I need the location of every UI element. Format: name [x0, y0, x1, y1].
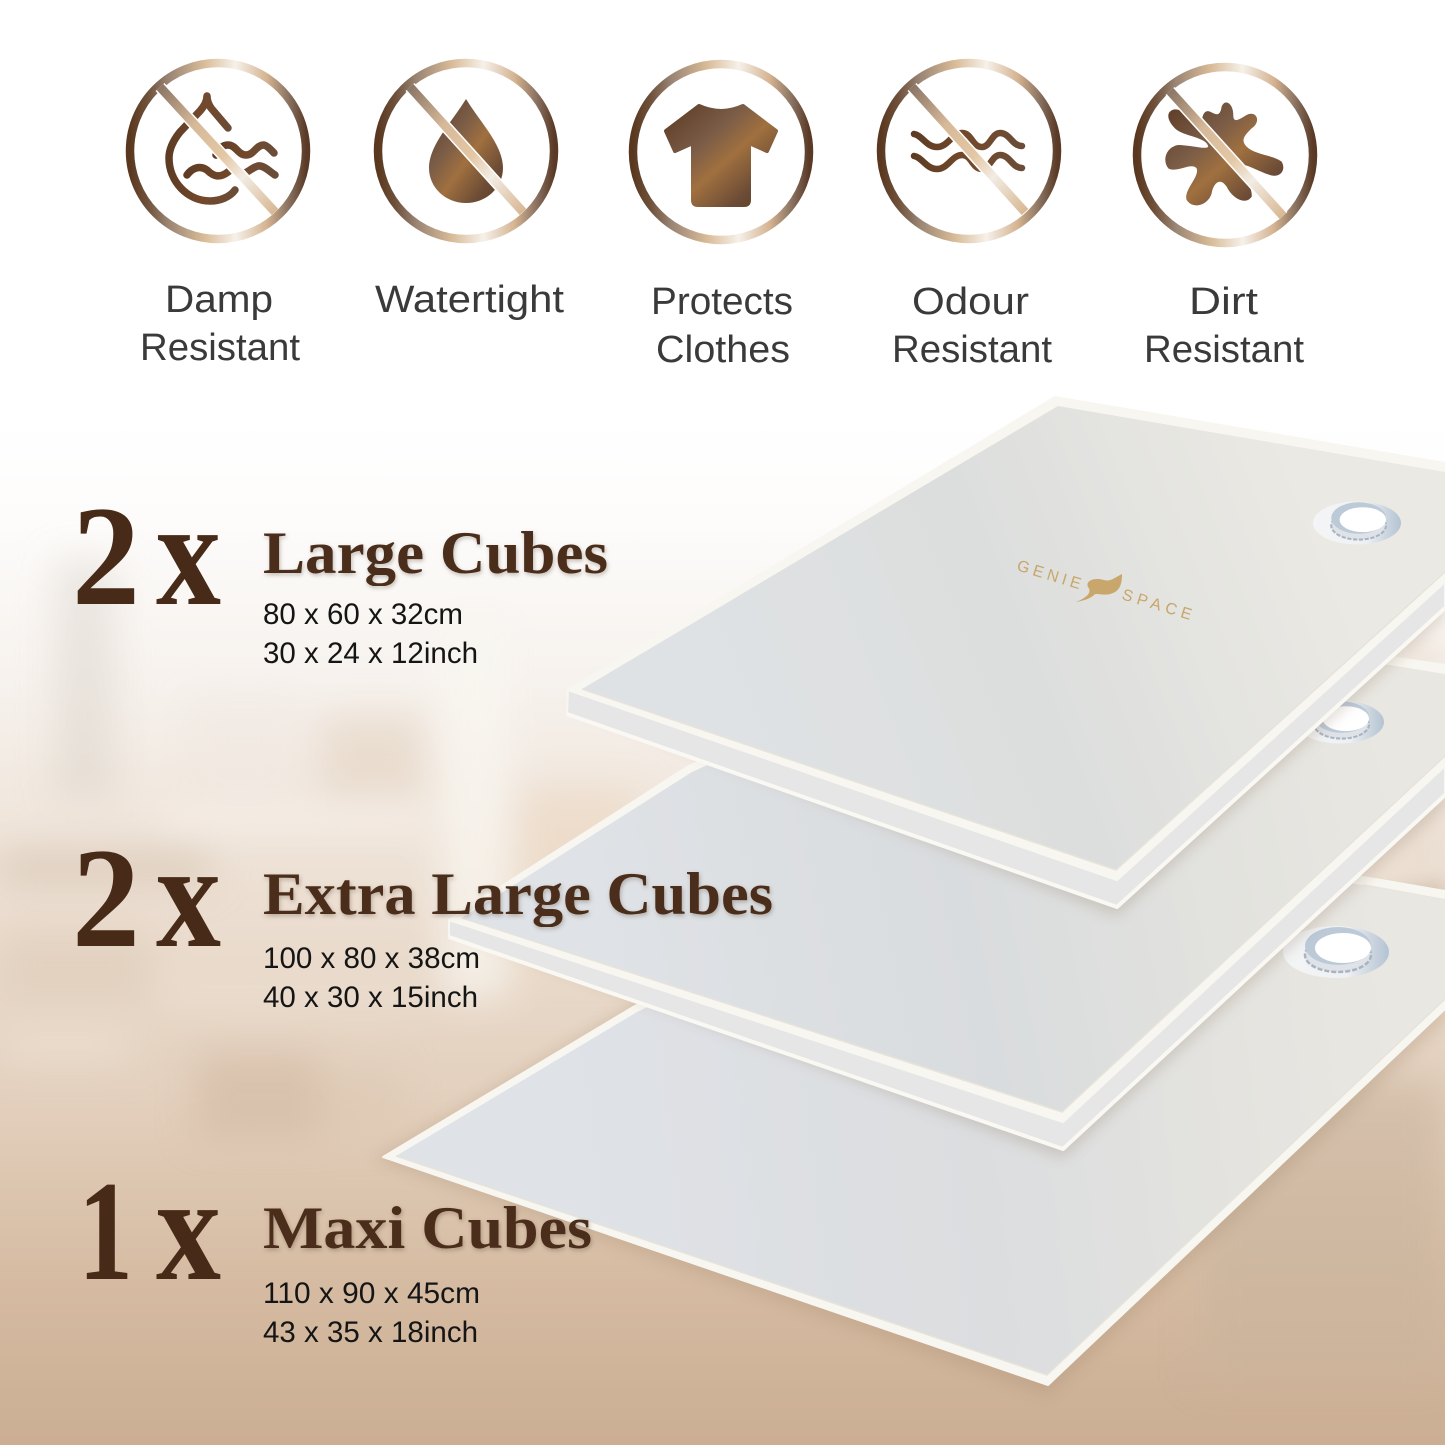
label: odour resistant: Odour: [912, 281, 1029, 323]
valve: extra large cube: [1296, 700, 1384, 744]
row: large cubes: [72, 471, 608, 670]
label: protects clothes: Protects: [651, 281, 793, 323]
quantity 1x: 1: [78, 1152, 133, 1310]
label: damp resistant: Damp: [165, 279, 273, 321]
quantity 2x: x: [156, 813, 221, 979]
quantity 2x: x: [156, 471, 221, 637]
dimensions: 100 x 80 x 38cm: [263, 942, 480, 975]
dimensions: 110 x 90 x 45cm: [263, 1277, 480, 1310]
valve: large cube: [1313, 501, 1401, 545]
logo: genie space: GENIE: [1015, 558, 1083, 593]
label: dirt resistant: Resistant: [1144, 329, 1304, 371]
quantity 2x: 2: [72, 477, 140, 635]
row: maxi cubes: [78, 1146, 592, 1349]
icon: watertight: [378, 63, 554, 239]
valve: maxi cube: [1283, 926, 1389, 978]
label: protects clothes: Clothes: [656, 329, 790, 371]
icon: damp resistant: [130, 63, 306, 239]
quantity 1x: x: [156, 1146, 221, 1312]
dimensions: 43 x 35 x 18inch: [263, 1316, 478, 1349]
dimensions: 30 x 24 x 12inch: [263, 637, 478, 670]
dimensions: 80 x 60 x 32cm: [263, 598, 463, 631]
dimensions: 40 x 30 x 15inch: [263, 981, 478, 1014]
label: damp resistant: Resistant: [140, 327, 300, 369]
bag: large cubes: [560, 397, 1445, 916]
label: dirt resistant: Dirt: [1189, 281, 1259, 323]
logo: genie space: [1015, 558, 1194, 624]
logo: genie space: SPACE: [1120, 587, 1194, 624]
icon: t-shirt protects clothes: [633, 64, 809, 240]
bag: maxi cube: [375, 820, 1445, 1396]
icon: dirt resistant: [1137, 67, 1313, 243]
label: watertight: Watertight: [375, 279, 564, 321]
icon: odour resistant: [881, 63, 1057, 239]
quantity 2x: 2: [72, 819, 140, 977]
row: extra large cubes: [72, 813, 773, 1014]
heading: Maxi Cubes: [263, 1195, 592, 1261]
heading: Extra Large Cubes: [263, 861, 773, 927]
heading: Large Cubes: [263, 520, 608, 586]
bag: extra large cubes: [442, 620, 1445, 1158]
label: odour resistant: Resistant: [892, 329, 1052, 371]
